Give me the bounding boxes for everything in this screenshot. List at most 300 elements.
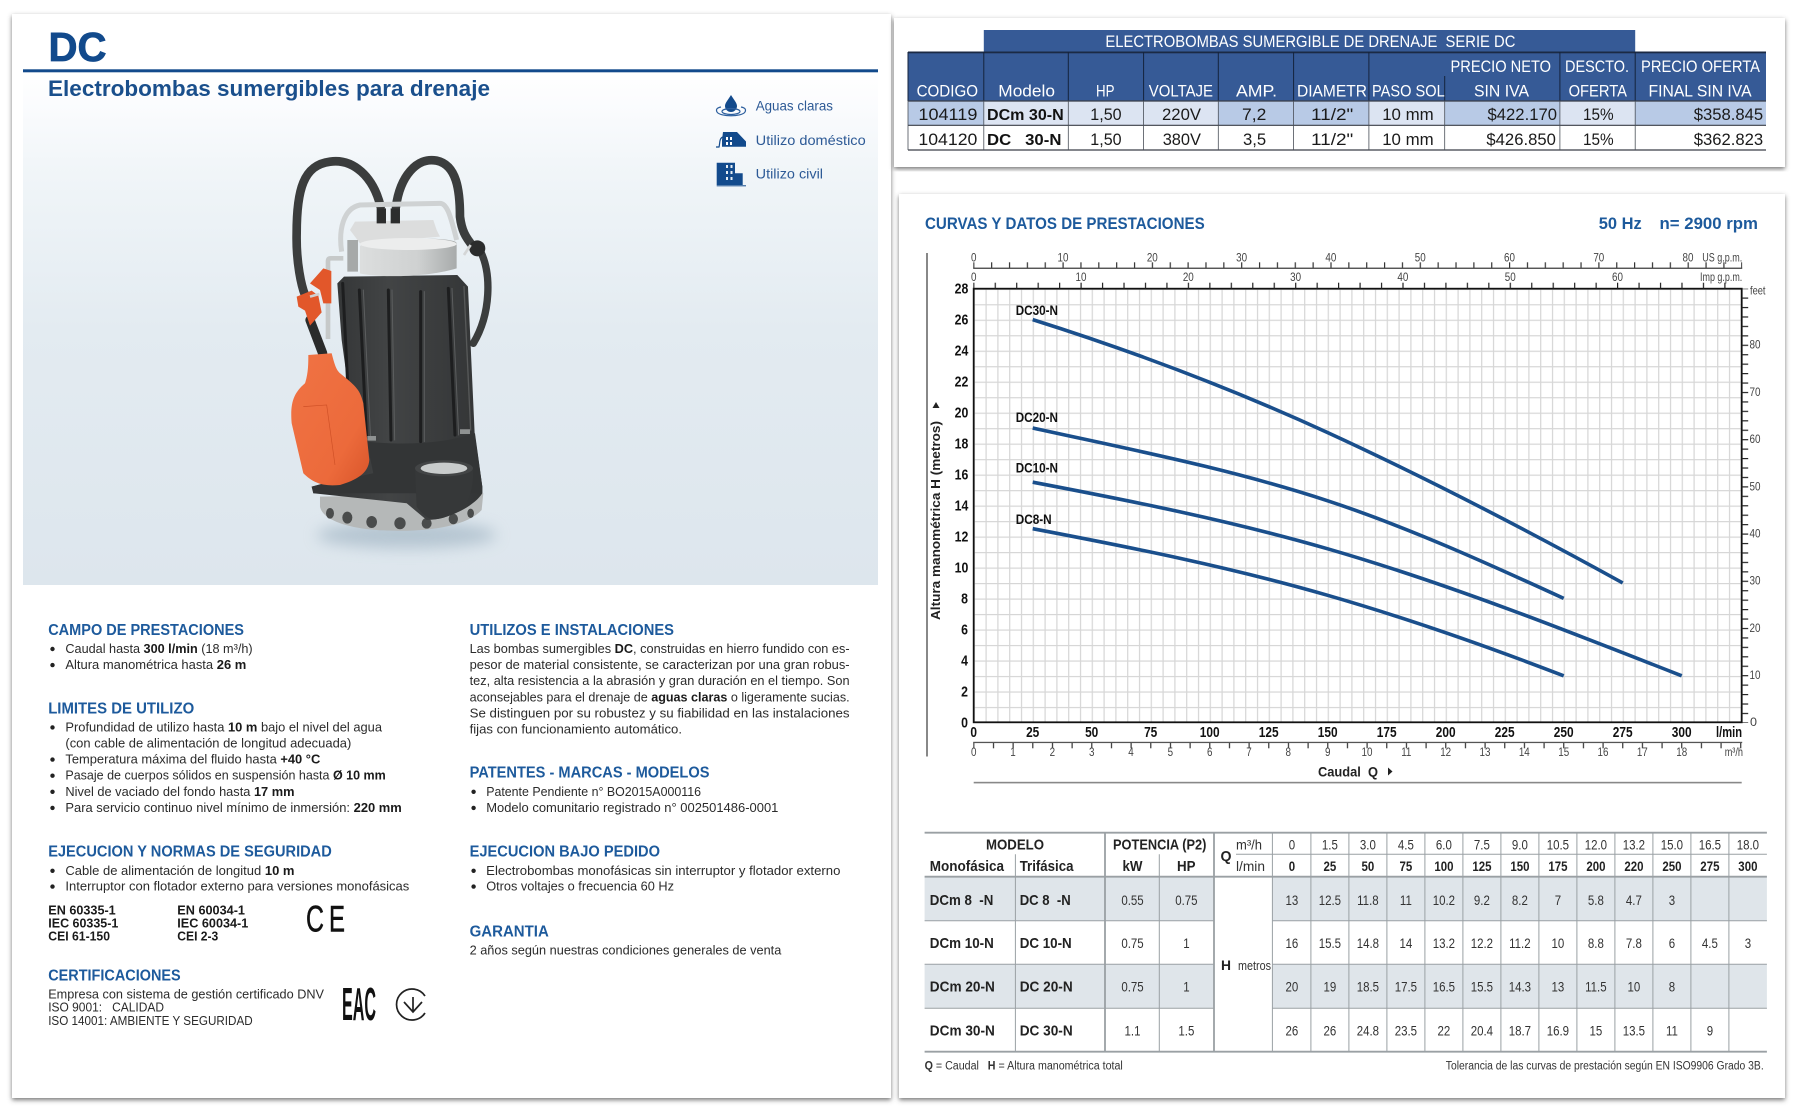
header: l/min values: 150	[1510, 858, 1529, 874]
list lines: Modelo comunitario registrado n° 002501486-0001	[486, 800, 778, 815]
certification text: ISO 14001: AMBIENTE Y SEGURIDAD	[48, 1013, 253, 1028]
list lines: (con cable de alimentación de longitud adecuada)	[65, 736, 351, 750]
row: DC 30	[930, 1023, 1713, 1040]
row: DC 30: 22	[1438, 1023, 1450, 1039]
row: DC 20: 8	[1669, 979, 1675, 995]
curve: DC20-N: DC20-N	[1016, 410, 1058, 425]
table row 2: 3,5	[1243, 130, 1266, 149]
left axis: metres: 16	[955, 466, 969, 483]
row: DC 10: 14.8	[1357, 935, 1379, 951]
bullets	[50, 647, 55, 667]
panel background	[899, 194, 1785, 1098]
panel: price table	[894, 18, 1785, 167]
right axis: feet: 20	[1750, 621, 1761, 635]
list lines: Patente Pendiente n° BO2015A000116	[486, 784, 701, 799]
bracket and bolt	[347, 240, 358, 272]
row: DC 10: 14	[1400, 935, 1412, 951]
shaded rows	[925, 877, 1767, 1008]
row: DC 20: DC 20-N	[1020, 979, 1073, 996]
row: DC 20: 0.75	[1121, 979, 1144, 995]
left axis: metres: 24	[955, 343, 969, 359]
header: l/min values: 175	[1548, 858, 1567, 874]
top axis: US gpm: 60	[1504, 252, 1515, 265]
row: DC 30: 23.5	[1395, 1023, 1417, 1039]
row: DC 8: DCm 8 -N	[930, 892, 993, 909]
left axis: metres: 2	[961, 683, 968, 700]
plot grid	[974, 289, 1742, 722]
left axis: metres: 8	[961, 590, 968, 607]
icon: building	[717, 163, 746, 186]
list line 1: Caudal hasta 300 l/min (18 m³/h)	[65, 641, 253, 656]
table row 2: 11/2"	[1311, 130, 1353, 149]
block: ejecucion bajo pedido	[470, 844, 840, 894]
top axis: US gpm: 0	[971, 252, 976, 265]
row: DC 10: 6	[1669, 935, 1675, 951]
bottom axis: m3/h: 3	[1089, 746, 1094, 759]
performance data table	[925, 833, 1767, 1072]
top axis: Imp gpm: 20	[1183, 271, 1194, 284]
bottom axis: l/min: 25	[1026, 724, 1039, 740]
table row 2: DC 30-N	[987, 132, 1061, 149]
table header	[908, 52, 1766, 101]
bottom axis: l/min: 300	[1672, 724, 1692, 740]
header: m3/h values: 12.0	[1585, 836, 1607, 853]
bullets	[50, 869, 55, 889]
standards list	[48, 903, 248, 944]
header: m3/h values: 7.5	[1474, 836, 1490, 853]
list lines	[65, 719, 402, 815]
subtitle: Electrobombas sumergibles para drenaje	[48, 76, 490, 101]
table row 1: 1,50	[1090, 105, 1122, 124]
header: l/min values: 125	[1472, 858, 1491, 874]
top axis: Imp gpm: 0	[971, 271, 976, 284]
top axis: Imp gpm: 30	[1290, 271, 1301, 284]
bottom axis: m3/h: 18	[1676, 746, 1687, 759]
row: DC 30: 26	[1286, 1023, 1298, 1039]
heading: UTILIZOS E INSTALACIONES	[470, 622, 674, 639]
header: l/min values: 300	[1738, 858, 1757, 874]
header: m3/h values	[1289, 836, 1759, 853]
pump shadow	[317, 522, 497, 548]
certification text: ISO 9001: CALIDAD	[48, 1000, 164, 1015]
row: DC 30: 16.9	[1547, 1023, 1569, 1039]
table header: PASO SOL	[1372, 82, 1445, 100]
bullets	[50, 725, 55, 810]
float switch	[291, 353, 369, 485]
header: flow units: Q	[1220, 848, 1232, 865]
table row 2: $426.850	[1486, 130, 1556, 149]
heading: CERTIFICACIONES	[48, 968, 181, 985]
header: m3/h values: 10.5	[1547, 836, 1569, 853]
row: DC 30: 1.1	[1125, 1023, 1140, 1039]
header: flow units: l/min	[1236, 858, 1265, 874]
cables	[297, 160, 488, 353]
row: DC 8: 5.8	[1588, 892, 1604, 908]
table row 1: 11/2"	[1311, 105, 1353, 124]
block: garantia	[470, 923, 782, 957]
header: modelo and power: HP	[1177, 858, 1196, 875]
panel: product sheet	[12, 14, 891, 1098]
left axis: metres	[955, 281, 969, 731]
row: DC 30: 9	[1707, 1023, 1713, 1039]
bottom axis: m3/h: 14	[1519, 746, 1530, 759]
table row 2: 10 mm	[1382, 130, 1434, 149]
row: DC 30: 26	[1324, 1023, 1336, 1039]
row: DC 30: DC 30-N	[1020, 1023, 1073, 1040]
block: certificaciones: EAC	[342, 978, 376, 1030]
header: modelo and power: kW	[1122, 858, 1143, 875]
title: DC: DC	[48, 24, 106, 70]
header: m3/h values: 18.0	[1737, 836, 1759, 853]
warranty text: 2 años según nuestras condiciones generales de venta	[470, 942, 782, 957]
bottom axis: m3/h: 6	[1207, 746, 1212, 759]
left axis: metres: 10	[955, 559, 969, 576]
top axis: US gpm: US g.p.m.	[1702, 250, 1742, 264]
bottom axis: l/min: 75	[1144, 724, 1157, 740]
sheet background	[12, 14, 891, 1098]
bottom axis: m3/h: m³/h	[1725, 745, 1743, 759]
row: DC 10: 10	[1552, 935, 1564, 951]
table header: PRECIO OFERTA	[1641, 57, 1761, 76]
bottom axis: m3/h: 0	[971, 746, 976, 759]
pump illustration	[291, 160, 497, 548]
bottom axis: m3/h: 13	[1480, 746, 1490, 759]
row: DC 8: 12.5	[1319, 892, 1341, 908]
left axis: metres: 6	[961, 621, 968, 638]
header: l/min values: 75	[1400, 858, 1412, 874]
paragraph: aconsejables para el drenaje de aguas claras o ligeramente sucias.	[470, 689, 850, 704]
table header: CODIGO	[917, 82, 978, 100]
icon: CE mark: C	[306, 898, 324, 940]
row: DC 20: 17.5	[1395, 979, 1417, 995]
bottom axis: l/min: 175	[1377, 724, 1397, 740]
row: DC 8: 10.2	[1433, 892, 1455, 908]
row: DC 8	[930, 892, 1675, 909]
row: DC 8: 4.7	[1626, 892, 1642, 908]
panel: performance curves and data	[899, 194, 1785, 1098]
bottom axis: m3/h: 9	[1325, 746, 1330, 759]
bottom axis: l/min: 250	[1554, 724, 1574, 740]
standards list: EN 60034-1	[177, 903, 245, 917]
header: l/min values: 100	[1434, 858, 1453, 874]
row: DC 30: 20.4	[1471, 1023, 1493, 1039]
row: DC 10: 1	[1183, 935, 1190, 951]
row: DC 8: 3	[1669, 892, 1675, 908]
top axis: US gpm: 70	[1593, 252, 1604, 265]
block: ejecucion y normas de seguridad	[48, 844, 410, 944]
table row 2: 380V	[1163, 130, 1202, 149]
left axis: metres: 12	[955, 528, 969, 545]
H metros label	[1221, 957, 1271, 973]
curve: DC20-N	[1016, 410, 1564, 598]
performance chart	[926, 250, 1766, 783]
row: DC 10: 0.75	[1121, 935, 1144, 951]
top axis: Imp gpm: 10	[1076, 271, 1086, 284]
left axis: metres: 18	[955, 435, 969, 452]
table row 2	[908, 125, 1766, 150]
bottom axis: m3/h: 7	[1246, 746, 1252, 759]
heading: EJECUCION BAJO PEDIDO	[470, 844, 660, 860]
header: l/min values: 275	[1700, 858, 1719, 874]
bottom axis: l/min: 0	[970, 724, 977, 740]
row: DC 10: 13.2	[1433, 935, 1455, 951]
header: l/min values: 0	[1289, 858, 1295, 874]
housing ribs	[343, 283, 471, 442]
discharge outlet	[415, 468, 473, 519]
header: l/min values: 50	[1362, 858, 1374, 874]
heading: GARANTIA	[470, 923, 549, 940]
heading: PATENTES - MARCAS - MODELOS	[470, 764, 710, 781]
list lines: Nivel de vaciado del fondo hasta 17 mm	[65, 784, 295, 799]
bottom axis: m3/h: 4	[1128, 746, 1134, 759]
table row 1: 104119	[918, 105, 977, 124]
row: DC 10: 12.2	[1471, 935, 1493, 951]
orange clamp	[297, 268, 331, 326]
left chart rule	[926, 253, 928, 756]
list lines: Temperatura máxima del fluido hasta +40 °C	[65, 752, 321, 767]
list lines: Interruptor con flotador externo para versiones monofásicas	[65, 879, 410, 894]
certification text	[48, 986, 324, 1028]
base strainer	[320, 493, 483, 531]
bottom axis: m3/h: 15	[1558, 746, 1569, 759]
bottom axis: m3/h: 1	[1010, 746, 1016, 759]
header: l/min values	[1289, 858, 1757, 874]
table title bar: ELECTROBOMBAS SUMERGIBLE DE DRENAJE SERIE DC	[1105, 33, 1515, 51]
row: DC 20: 11.5	[1585, 979, 1607, 995]
right axis: feet: 0	[1750, 715, 1757, 729]
right axis: feet: 60	[1750, 432, 1761, 446]
table row 1: 15%	[1583, 105, 1614, 124]
bottom axis: l/min: 150	[1318, 724, 1338, 740]
header: modelo and power: POTENCIA (P2)	[1113, 837, 1206, 854]
header: l/min values: 200	[1586, 858, 1605, 874]
paragraph	[470, 641, 850, 736]
row: DC 20	[930, 979, 1675, 996]
top axis: US gpm: 10	[1058, 252, 1068, 265]
bottom axis: l/min: 225	[1495, 724, 1515, 740]
heading: frequency: 50 Hz	[1599, 214, 1642, 233]
row: DC 8: 8.2	[1512, 892, 1528, 908]
row: DC 10: 15.5	[1319, 935, 1341, 951]
table header: AMP.	[1236, 82, 1277, 100]
row: DC 20: 13	[1552, 979, 1564, 995]
motor housing	[312, 275, 482, 520]
paragraph: Las bombas sumergibles DC, construidas en hierro fundido con es-	[470, 641, 850, 656]
title rule	[23, 69, 878, 72]
bottom axis: l/min: 125	[1259, 724, 1279, 740]
motor cap	[360, 238, 457, 276]
table row 1: $422.170	[1488, 105, 1557, 124]
bottom axis: m3/h: 16	[1598, 746, 1608, 759]
curve: DC8-N: DC8-N	[1016, 512, 1052, 527]
list line 2: Altura manométrica hasta 26 m	[65, 657, 246, 672]
header: m3/h values: 3.0	[1360, 836, 1376, 853]
row: DC 30: 11	[1666, 1023, 1678, 1039]
block: patentes	[470, 764, 778, 815]
block: campo de prestaciones	[48, 622, 253, 672]
icon: house	[716, 132, 746, 147]
bottom axis: m3/h: 11	[1401, 746, 1411, 759]
header: modelo and power: Monofásica	[930, 858, 1005, 875]
list lines	[486, 784, 778, 815]
row: DC 8: 13	[1286, 892, 1298, 908]
header: m3/h values: 0	[1289, 836, 1295, 853]
list lines: Pasaje de cuerpos sólidos en suspensión hasta Ø 10 mm	[65, 768, 386, 783]
list lines: Profundidad de utilizo hasta 10 m bajo el nivel del agua	[65, 719, 383, 734]
row: DC 10: 8.8	[1588, 935, 1604, 951]
table row 1	[908, 101, 1766, 125]
left axis: metres: 20	[955, 404, 969, 421]
row: DC 30: 24.8	[1357, 1023, 1379, 1039]
row: DC 8: 11.8	[1357, 892, 1379, 908]
icon: CE mark: E	[329, 898, 345, 940]
row: DC 10: DC 10-N	[1020, 935, 1072, 952]
icon: water drop	[716, 95, 746, 116]
top axis: Imp gpm: 50	[1505, 271, 1516, 284]
table title bar	[984, 30, 1635, 52]
row: DC 20: 15.5	[1471, 979, 1493, 995]
row: DC 30: 13.5	[1623, 1023, 1645, 1039]
list lines	[486, 863, 840, 894]
top axis: Imp gpm: 40	[1397, 271, 1408, 284]
table header: Modelo	[998, 82, 1055, 100]
top axis: US gpm: 80	[1683, 252, 1693, 265]
top axis: US gpm: 50	[1415, 252, 1426, 265]
row: DC 20: 1	[1183, 979, 1190, 995]
header: l/min values: 250	[1662, 858, 1681, 874]
standards list: IEC 60034-1	[177, 916, 248, 930]
cable clamp	[469, 240, 485, 256]
H metros label: metros	[1238, 958, 1271, 973]
left axis: metres: 14	[955, 497, 969, 514]
table row 1: DCm 30-N	[987, 107, 1064, 124]
heading: CAMPO DE PRESTACIONES	[48, 622, 244, 639]
block: utilizos e instalaciones	[470, 622, 850, 736]
bottom axis title: Caudal Q	[1318, 764, 1378, 780]
list lines: Cable de alimentación de longitud 10 m	[65, 863, 295, 878]
certification text: Empresa con sistema de gestión certificado DNV	[48, 986, 324, 1001]
row: DC 20: 16.5	[1433, 979, 1455, 995]
table header: SIN IVA	[1474, 82, 1530, 100]
header: flow units	[1220, 836, 1265, 874]
carry handle	[341, 203, 457, 252]
row: DC 8: DC 8 -N	[1020, 892, 1071, 909]
label: Utilizo domestico: Utilizo doméstico	[756, 132, 866, 148]
right axis: feet: 10	[1750, 668, 1761, 682]
list lines: Electrobombas monofásicas sin interruptor y flotador externo	[486, 863, 840, 878]
right axis: feet: 40	[1750, 526, 1761, 540]
top axis: Imp gpm	[971, 270, 1742, 289]
row: DC 10: 16	[1286, 935, 1298, 951]
row: DC 8: 7	[1555, 892, 1561, 908]
bottom axis: m3/h	[971, 742, 1743, 759]
table row 2: 1,50	[1090, 130, 1122, 149]
row: DC 8: 9.2	[1474, 892, 1490, 908]
block: certificaciones	[48, 968, 425, 1030]
header: m3/h values: 4.5	[1398, 836, 1414, 853]
right axis: feet: feet	[1750, 283, 1766, 297]
top axis: US gpm	[971, 250, 1742, 269]
top axis: US gpm: 20	[1147, 252, 1158, 265]
table row 1: 220V	[1162, 105, 1202, 124]
row: DC 10: 11.2	[1509, 935, 1531, 951]
row: DC 8: 11	[1400, 892, 1412, 908]
bottom axis: m3/h: 5	[1168, 746, 1173, 759]
row: DC 20: 14.3	[1509, 979, 1531, 995]
row: DC 20: 18.5	[1357, 979, 1379, 995]
header: modelo and power: Trifásica	[1020, 858, 1074, 875]
curve: DC10-N: DC10-N	[1016, 460, 1058, 476]
row: DC 20: 19	[1324, 979, 1336, 995]
top axis: Imp gpm: 60	[1612, 271, 1623, 284]
table header: PRECIO NETO	[1450, 57, 1551, 76]
H metros label: H	[1221, 957, 1231, 973]
plot frame	[974, 289, 1742, 722]
right axis: feet: 70	[1750, 385, 1761, 399]
row: DC 30: 15	[1590, 1023, 1602, 1039]
left axis title: Altura manométrica H (metros)	[929, 421, 943, 620]
footnote: tolerance: Tolerancia de las curvas de prestación según EN ISO9906 Grado 3B.	[1446, 1060, 1764, 1072]
standards list: EN 60335-1	[48, 903, 116, 917]
curve: DC30-N: DC30-N	[1016, 303, 1058, 318]
header: modelo and power	[930, 837, 1206, 875]
header: m3/h values: 13.2	[1623, 836, 1645, 853]
curve: DC8-N	[1016, 512, 1564, 676]
right axis: feet: 80	[1750, 338, 1761, 352]
heading: LIMITES DE UTILIZO	[48, 701, 194, 718]
table header: VOLTAJE	[1149, 82, 1213, 100]
panel background	[894, 18, 1785, 167]
left axis: metres: 26	[955, 312, 969, 328]
label: Utilizo civil: Utilizo civil	[756, 166, 823, 182]
bottom axis: l/min: 275	[1613, 724, 1633, 740]
header: flow units: m³/h	[1236, 836, 1262, 852]
icon: conformity mark	[397, 989, 425, 1020]
heading: rpm: n= 2900 rpm	[1660, 214, 1758, 233]
row: DC 10: 3	[1745, 935, 1751, 951]
row: DC 30: 18.7	[1509, 1023, 1531, 1039]
left axis: metres: 28	[955, 281, 969, 297]
row: DC 20: DCm 20-N	[930, 979, 995, 996]
table header: DESCTO.	[1565, 57, 1629, 76]
heading: EJECUCION Y NORMAS DE SEGURIDAD	[48, 844, 332, 860]
header: m3/h values: 15.0	[1661, 836, 1683, 853]
row: DC 8: 0.55	[1121, 892, 1144, 908]
right axis: feet: 50	[1750, 479, 1761, 493]
bullets	[471, 869, 476, 889]
header: m3/h values: 9.0	[1512, 836, 1528, 853]
table row 1: 10 mm	[1382, 105, 1434, 124]
table header: DIAMETR	[1297, 82, 1367, 100]
left axis: metres: 22	[955, 373, 969, 390]
list lines: Otros voltajes o frecuencia 60 Hz	[486, 879, 674, 894]
table header: FINAL SIN IVA	[1648, 82, 1752, 100]
bottom axis: l/min	[970, 724, 1742, 741]
row: DC 10: 7.8	[1626, 935, 1642, 951]
bullets	[471, 790, 476, 810]
heading: curvas: CURVAS Y DATOS DE PRESTACIONES	[925, 214, 1205, 233]
paragraph: Se distinguen por su robustez y su fiabilidad en las instalaciones	[470, 705, 850, 720]
bottom axis: l/min: 50	[1085, 724, 1098, 740]
top axis: US gpm: 40	[1325, 252, 1336, 265]
table row 1: 7,2	[1242, 105, 1266, 124]
row: DC 8: 0.75	[1175, 892, 1198, 908]
paragraph: pesor de material consistente, se caracterizan por una gran robus-	[470, 657, 850, 672]
row: DC 10	[930, 935, 1751, 952]
header: m3/h values: 1.5	[1322, 836, 1338, 853]
application icons and labels	[716, 95, 866, 186]
label: Aguas claras: Aguas claras	[756, 98, 833, 114]
